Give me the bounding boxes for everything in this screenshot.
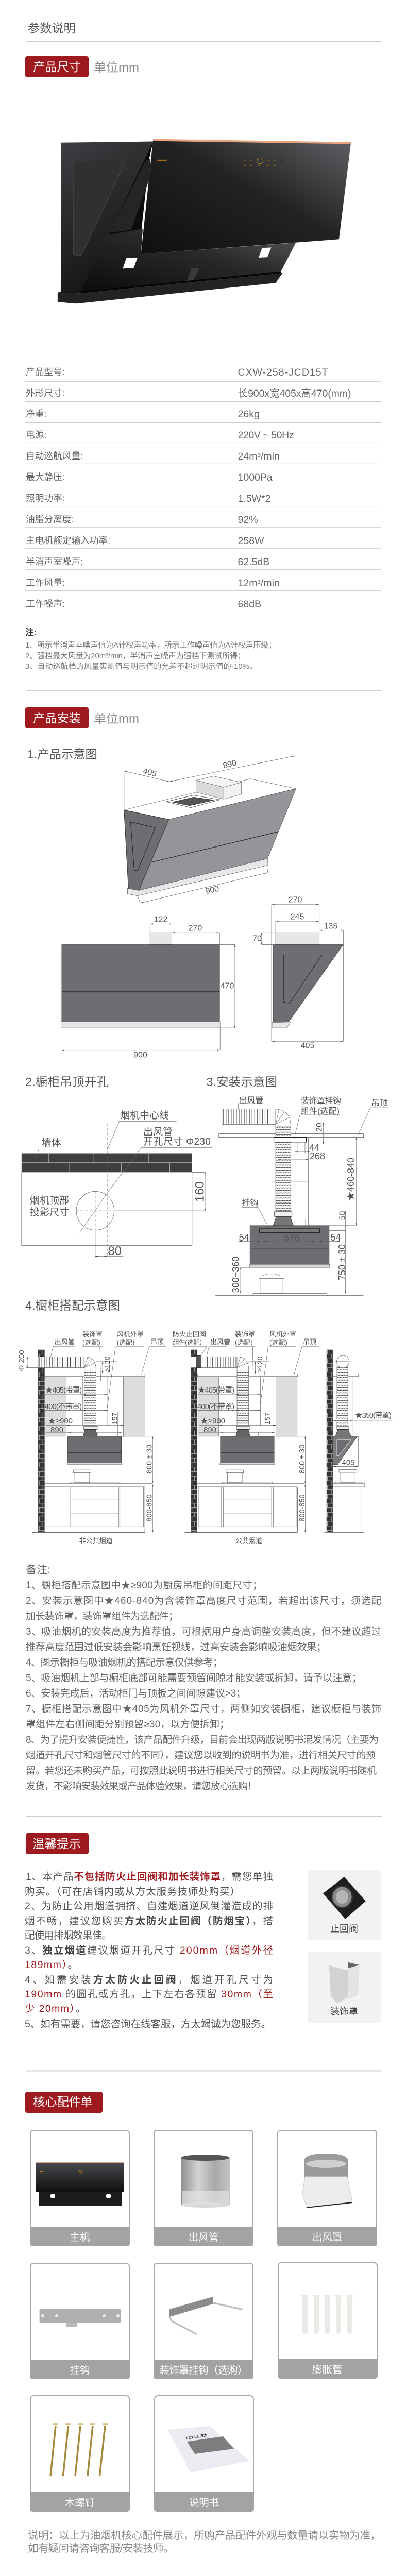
isometric product diagram: 890 (222, 758, 238, 771)
unit label: 单位mm (94, 61, 139, 75)
cabinet diagram: private flue: Φ 200 (18, 1350, 26, 1371)
table notes: 3、自动巡航档的风量实测值与明示值的允差不超过明示值的-10%。 (25, 662, 257, 671)
cabinet ceiling opening diagram (22, 1110, 212, 1258)
accessory card: 装饰罩 (308, 1952, 381, 2023)
specification table (25, 367, 381, 612)
part card: 木螺钉: 木螺钉 (65, 2497, 95, 2509)
specification table: 1000Pa (238, 472, 273, 483)
specification table: 92% (238, 514, 258, 526)
installation diagram: 300~360 (231, 1257, 241, 1293)
installation diagram: 54 (331, 1232, 341, 1243)
cabinet diagram: side elevation: ★350(带罩) (355, 1411, 392, 1420)
isometric product diagram: 405 (142, 767, 158, 779)
specification table: 24m³/min (238, 451, 280, 462)
specification table: 68dB (238, 599, 261, 610)
badge: 产品尺寸: 产品尺寸 (33, 60, 81, 74)
specification table: 净重: (26, 409, 46, 419)
tips text: 2、为防止公用烟道拥挤、自建烟道逆风倒灌造成的排 (25, 1901, 273, 1912)
cabinet diagram: side elevation: 405 (342, 1458, 355, 1467)
specification table: 1.5W*2 (238, 493, 270, 504)
installation remarks: 留。若您还未购买产品，可按照此说明书进行相关尺寸的预留。以上两版说明书随机 (26, 1765, 377, 1776)
cabinet diagram: private flue: 400(不带罩) (45, 1402, 82, 1411)
cabinet diagram: private flue: 157 (111, 1413, 119, 1425)
cabinet diagram: private flue: (选配) (117, 1338, 134, 1346)
installation diagram: 50 (338, 1211, 347, 1220)
installation remarks: 备注: (26, 1564, 50, 1576)
specification table: 长900x宽405x高470(mm) (238, 388, 351, 399)
table notes: 注: (25, 627, 37, 637)
accessory card: 装饰罩: 装饰罩 (330, 2006, 358, 2016)
product photo: range hood (58, 139, 351, 303)
installation diagram: 54 (239, 1232, 249, 1243)
heading: 橱柜吊顶开孔: 2.橱柜吊顶开孔 (25, 1075, 109, 1089)
table notes (25, 627, 276, 671)
cabinet diagram: private flue: 非公共烟道 (79, 1537, 113, 1545)
cabinet diagram: private flue: 风机外罩 (117, 1330, 144, 1338)
specification table: 最大静压: (26, 472, 65, 482)
cabinet diagram: public flue: 公共烟道 (235, 1537, 262, 1545)
installation remarks: 6、安装完成后，活动柜门与顶板之间间隙建议>3； (26, 1688, 246, 1699)
part card: 主机: 主机 (70, 2232, 90, 2243)
installation diagram: 装饰罩挂钩 (301, 1096, 341, 1106)
cabinet diagram: private flue: ★405(带罩) (45, 1386, 82, 1395)
part card: 出风管 (154, 2130, 253, 2246)
part card: 说明书 (154, 2396, 254, 2512)
cabinet ceiling opening diagram: 160 (193, 1181, 207, 1202)
isometric product diagram: 900 (205, 885, 220, 896)
cabinet ceiling opening diagram: 烟机中心线 (120, 1110, 169, 1121)
tips text: 购买。（可在店铺内或从方太服务技师处购买） (25, 1886, 240, 1897)
unit label: 单位mm (94, 712, 139, 726)
tips text: 烟不畅，建议您购买方太防火止回阀（防烟宝），搭 (25, 1915, 273, 1927)
tips text: 1、本产品不包括防火止回阀和加长装饰罩，需您单独 (26, 1871, 273, 1883)
cabinet diagram: public flue: 吊顶 (303, 1338, 316, 1346)
cabinet diagram: public flue: 157 (263, 1413, 272, 1425)
badge: 温馨提示: 温馨提示 (32, 1837, 81, 1851)
heading: 产品示意图: 1.产品示意图 (27, 748, 97, 761)
cabinet diagram: private flue (18, 1330, 166, 1545)
cabinet ceiling opening diagram: 投影尺寸 (30, 1207, 69, 1218)
installation diagram: 组件(选配) (301, 1107, 340, 1116)
installation diagram: 750 ± 30 (337, 1244, 347, 1280)
specification table: 产品型号: (26, 367, 65, 377)
side view diagram: 70 (252, 935, 262, 943)
cabinet diagram: public flue: 防火止回阀 (173, 1330, 206, 1338)
cabinet ceiling opening diagram: 开孔尺寸 Φ230 (143, 1136, 211, 1147)
accessory card: 止回阀: 止回阀 (330, 1924, 358, 1934)
front view diagram: 470 (221, 982, 234, 990)
installation remarks: 发货，不影响安装效果或产品体验效果，请您放心选购！ (26, 1781, 257, 1792)
specification table: CXW-258-JCD15T (238, 367, 328, 378)
part card: 主机 (30, 2130, 130, 2246)
cabinet diagram: private flue: 800 ± 30 (146, 1445, 154, 1473)
side view diagram: 405 (301, 1042, 314, 1050)
cabinet diagram: private flue: 装饰罩 (82, 1330, 103, 1338)
part card: 膨胀管 (278, 2263, 378, 2379)
installation remarks: 4、图示橱柜与吸油烟机的搭配示意仅供参考； (26, 1657, 223, 1668)
part card: 装饰罩挂钩: 装饰罩挂钩（选购） (160, 2365, 247, 2376)
section heading: 参数说明: 参数说明 (28, 22, 76, 35)
heading: 橱柜搭配示意图: 4.橱柜搭配示意图 (25, 1299, 120, 1312)
side view diagram: 245 (291, 913, 304, 921)
installation diagram: 挂钩 (242, 1198, 259, 1208)
badge: 产品尺寸 (25, 56, 89, 77)
installation diagram: 20 (315, 1123, 324, 1132)
table notes: 1、所示半消声室噪声值为A计权声功率，所示工作噪声值为A计权声压级； (25, 640, 276, 650)
cabinet ceiling opening diagram: 80 (108, 1244, 122, 1258)
tips text (25, 1871, 273, 2030)
cabinet diagram: public flue: (选配) (269, 1338, 287, 1346)
tips text: 3、独立烟道建议烟道开孔尺寸 200mm（烟道外径 (25, 1944, 273, 1956)
cabinet diagram: private flue: ★≥900 (48, 1417, 73, 1426)
installation diagram: 268 (310, 1151, 325, 1161)
specification table: 外形尺寸: (26, 388, 65, 398)
cabinet diagram: private flue: ≥120 (103, 1356, 111, 1372)
part card: 说明书: 说明书 (189, 2497, 219, 2509)
specification table: 照明功率: (26, 493, 65, 503)
cabinet ceiling opening diagram: 烟机顶部 (30, 1195, 69, 1206)
accessories note: 说明：以上为油烟机核心配件展示，所购产品配件外观与数量请以实物为准， (28, 2530, 381, 2541)
accessory card: 止回阀 (308, 1870, 381, 1940)
installation remarks: 8、为了提升安装便捷性，该产品配件升级，目前会出现两版说明书混发情况（主要为 (26, 1734, 379, 1745)
specification table: 258W (238, 535, 264, 547)
specification table: 26kg (238, 409, 260, 420)
badge: 核心配件单 (25, 2092, 103, 2113)
isometric product diagram (124, 756, 296, 903)
specification table: 半消声室噪声: (26, 556, 83, 567)
front view diagram: 270 (189, 924, 202, 933)
cabinet diagram: side elevation (325, 1349, 393, 1532)
cabinet diagram: public flue: 组件(选配） (173, 1338, 206, 1346)
part card: 挂钩: 挂钩 (70, 2365, 90, 2376)
cabinet diagram: public flue: (选配) (235, 1338, 253, 1346)
tips text: 4、如需安装方太防火止回阀，烟道开孔尺寸为 (25, 1974, 273, 1986)
cabinet diagram: public flue: ≥120 (256, 1356, 264, 1372)
cabinet diagram: public flue: 400(不带罩) (197, 1402, 234, 1411)
badge: 温馨提示 (26, 1833, 89, 1854)
part card: 装饰罩挂钩 (154, 2263, 253, 2379)
cabinet diagram: private flue: 吊顶 (150, 1338, 164, 1346)
installation remarks: 7、橱柜搭配示意图中★405为风机外罩尺寸，两侧如安装橱柜，建议橱柜与装饰 (26, 1703, 381, 1715)
heading: 安装示意图: 3.安装示意图 (206, 1075, 277, 1089)
specification table: 62.5dB (238, 556, 269, 568)
badge: 产品安装: 产品安装 (33, 711, 81, 725)
installation diagram: 44 (309, 1143, 319, 1153)
tips text: 5、如有需要，请您咨询在线客服，方太竭诚为您服务。 (25, 2019, 271, 2030)
installation remarks: 1、橱柜搭配示意图中★≥900为厨房吊柜的间距尺寸； (26, 1580, 262, 1591)
side view diagram: 135 (324, 922, 337, 930)
tips text: 190mm 的圆孔或方孔，上下左右各预留 30mm（至 (25, 1989, 273, 2000)
tips text: 配使用排烟效果佳。 (25, 1930, 112, 1941)
installation diagram: 546 (284, 1232, 299, 1243)
badge: 核心配件单: 核心配件单 (33, 2095, 93, 2109)
installation remarks: 加长装饰罩，装饰罩组件为选配件； (26, 1611, 178, 1622)
installation remarks (26, 1564, 381, 1792)
cabinet diagram: private flue: 890 (50, 1426, 63, 1434)
cabinet diagram: private flue: 800-850 (146, 1494, 154, 1522)
installation diagram: ★460-840 (346, 1158, 356, 1201)
badge: 产品安装 (25, 707, 89, 728)
part card: 膨胀管: 膨胀管 (312, 2364, 342, 2376)
front view diagram: 122 (154, 915, 167, 924)
part card: 挂钩 (30, 2263, 130, 2379)
cabinet diagram: public flue: 890 (204, 1426, 216, 1434)
cabinet diagram: public flue (173, 1330, 319, 1545)
part card: 出风管: 出风管 (189, 2232, 218, 2243)
cabinet diagram: public flue: 风机外罩 (269, 1330, 296, 1338)
tips text: 189mm）。 (25, 1959, 78, 1971)
part card: 出风罩 (277, 2130, 377, 2246)
specification table: 油脂分离度: (26, 514, 74, 524)
front view diagram: 900 (133, 1051, 147, 1059)
cabinet ceiling opening diagram: 出风管 (143, 1126, 173, 1138)
specification table: 工作风量: (26, 578, 65, 588)
cabinet diagram: private flue: 出风管 (55, 1338, 75, 1346)
cabinet diagram: public flue: 装饰罩 (235, 1330, 255, 1338)
accessories note: 如有疑问请咨询客服/安装技师。 (28, 2543, 174, 2554)
part card: 木螺钉 (30, 2396, 130, 2512)
cabinet diagram: public flue: 出风管 (210, 1338, 230, 1346)
installation remarks: 罩组件左右侧间距分别预留≥30，以方便拆卸； (26, 1719, 229, 1730)
cabinet diagram: public flue: ★≥900 (200, 1417, 225, 1426)
specification table: 电源: (26, 430, 46, 440)
cabinet diagram: public flue: 800 ± 30 (298, 1445, 307, 1473)
cabinet ceiling opening diagram: 墙体 (42, 1137, 61, 1148)
front view diagram (61, 915, 235, 1059)
part card: 出风罩: 出风罩 (312, 2232, 342, 2243)
tips text: 少 20mm）。 (25, 2003, 86, 2014)
table notes: 2、强档最大风量为20m³/min，半消声室噪声为强档下测试所得； (25, 651, 245, 660)
installation remarks: 3、吸油烟机的安装高度为推荐值，可根据用户身高调整安装高度，但不建议超过 (26, 1626, 381, 1637)
installation remarks: 推荐高度范围过低安装会影响烹饪视线，过高安装会影响吸油烟效果； (26, 1641, 326, 1653)
side view diagram: 270 (289, 895, 302, 905)
installation remarks: 烟道开孔尺寸和烟管尺寸的不同），建议您以收到的说明书为准，进行相关尺寸的预 (26, 1750, 376, 1761)
installation diagram (215, 1096, 388, 1296)
installation remarks: 2、安装示意图中★460-840为含装饰罩高度尺寸范围，若超出该尺寸，须选配 (26, 1595, 381, 1606)
part card: 说明书: FOTILE 方太 (186, 2433, 208, 2441)
installation diagram: 出风管 (239, 1096, 264, 1105)
accessories note (28, 2530, 381, 2554)
installation diagram: 吊顶 (371, 1098, 388, 1108)
cabinet diagram: public flue: ★405(带罩) (198, 1386, 234, 1395)
side view diagram (252, 895, 344, 1050)
specification table: 12m³/min (238, 578, 280, 589)
cabinet diagram: private flue: (选配) (82, 1338, 100, 1346)
specification table: 220V ~ 50Hz (238, 430, 294, 441)
cabinet diagram: public flue: 800-850 (298, 1494, 307, 1522)
specification table: 主电机额定输入功率: (26, 535, 110, 546)
installation remarks: 5、吸油烟机上部与橱柜底部可能需要预留间隙才能安装或拆卸，请予以注意； (26, 1672, 362, 1684)
specification table: 工作噪声: (26, 599, 65, 609)
specification table: 自动巡航风量: (26, 451, 83, 461)
